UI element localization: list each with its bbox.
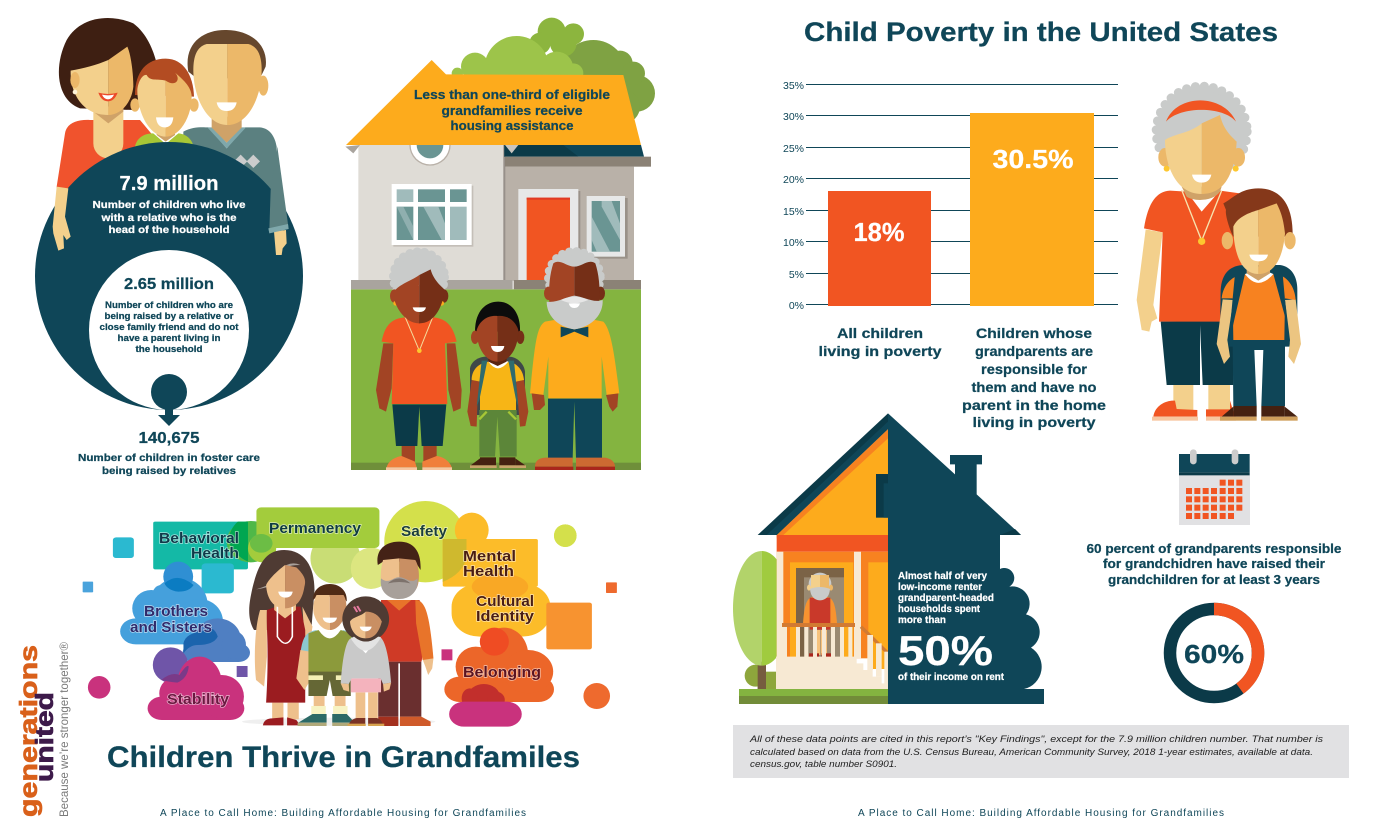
text: rent burden: Almost half of very [898,571,987,582]
text: 140,675 [78,430,260,477]
cloud: stability [153,647,188,683]
family group [242,542,435,726]
heading: Children Thrive in Grandfamiles: Children Thrive in Grandfamiles [107,741,580,774]
donut chart: 60%: 60% [1184,639,1244,669]
gridlines [806,84,1118,304]
text: 60 percent of grandparents: grandchildren for at least 3 years [1108,573,1320,587]
category label: all children [818,325,942,359]
label: Mental Health: Health [463,563,514,580]
text: rent burden [898,571,1005,683]
illustration: house and grandfamily [345,18,655,470]
logo: generations united: generations [15,645,43,817]
text: 2.65 million: being raised by a relative or [104,311,234,321]
big circle [35,142,303,410]
text: 2.65 million: the household [136,344,202,354]
note box: data sources: All of these data points are cited in this report’s "Key Findings", except for the 7.9 million children number. That number is [749,734,1323,745]
bar chart: child poverty [783,80,1118,430]
text: 60 percent of grandparents: 60 percent of grandparents responsible [1086,542,1342,556]
text: rent burden: grandparent-headed [898,593,994,604]
illustration: grandmother and grandson [1137,86,1301,421]
label: Cultural Identity [476,593,535,625]
text: rent burden: households spent [898,604,981,615]
label: Behavioral Health: Behavioral [159,530,239,547]
logo: generations united: Because we’re stronger together® [57,642,71,817]
bar: all children 18% [828,191,931,306]
dark half silhouette [888,413,1044,704]
text: rent burden: of their income on rent [898,672,1005,683]
grandfather [530,251,619,470]
label: Safety: Safety [401,523,448,540]
axis labels: 10% [783,237,804,249]
text: rent burden: low-income renter [898,582,982,593]
axis labels: 15% [783,206,804,218]
panel: housing assistance [345,18,655,470]
category label: children of grandparents: grandparents are [975,343,1093,359]
text: housing assistance callout: grandfamilies receive [442,103,582,118]
text: 7.9 million: head of the household [108,224,230,236]
category label: children of grandparents: responsible for [981,361,1088,377]
boy [300,630,317,657]
axis labels: 35% [783,80,804,92]
note box: data sources: calculated based on data from the U.S. Census Bureau, American Community Survey, 2018 1-year estimates, available at data. [750,747,1313,758]
text: 7.9 million: Number of children who live [92,199,246,211]
text: housing assistance callout: Less than one-third of eligible [414,87,610,102]
axis labels [783,80,804,312]
text: 60 percent of grandparents: for grandchidren have raised their [1103,557,1325,571]
text: 7.9 million: with a relative who is the [100,212,237,224]
boy with backpack [467,302,528,468]
text: 2.65 million [100,276,238,354]
category label: children of grandparents [962,325,1106,430]
label: Brothers and Sisters: Brothers [144,603,208,620]
text: rent burden: 50% [898,627,993,674]
label: Mental Health [463,548,516,580]
text: 2.65 million: 2.65 million [124,276,214,293]
category label: children of grandparents: living in poverty [972,414,1096,430]
label: Cultural Identity: Identity [476,608,535,625]
illustration: half house with rent statistic [733,413,1044,704]
note box: data sources [733,725,1349,778]
label: Mental Health: Mental [463,548,516,565]
label: Behavioral Health [159,530,239,562]
axis labels: 30% [783,111,804,123]
note box: data sources: census.gov, table number S0901. [750,759,897,770]
footer: right: A Place to Call Home: Building Affordable Housing for Grandfamilies [858,808,1224,819]
text: 60 percent of grandparents [1086,542,1342,587]
logo: generations united [15,642,71,817]
text: 2.65 million: have a parent living in [118,333,220,343]
grandmother [376,252,462,470]
grandmother [249,550,314,630]
illustration: colourful bubbles [83,501,617,727]
cloud: belonging [444,628,554,702]
cloud: brothers and sisters [120,577,223,644]
category label: all children: living in poverty [818,343,942,359]
panel: children thrive [83,501,617,819]
text: 2.65 million: Number of children who are [105,300,233,310]
bar: grandparent-headed 30.5% [970,113,1094,306]
footer: left: A Place to Call Home: Building Affordable Housing for Grandfamilies [160,808,526,819]
bar: grandparent-headed 30.5%: 30.5% [992,144,1074,174]
donut chart: 60% [1170,609,1258,697]
label: Belonging: Belonging [463,664,541,681]
roof banner [346,60,641,145]
bar: all children 18%: 18% [854,217,904,247]
axis labels: 25% [783,143,804,155]
label: Behavioral Health: Health [191,545,239,562]
inner white circle [89,250,249,410]
category label: children of grandparents: Children whose [976,325,1092,341]
trees [452,18,655,123]
text: housing assistance callout: housing assistance [450,118,574,133]
text: rent burden: more than [898,615,946,626]
illustration: family of three behind circle [57,18,277,207]
heading: Child Poverty in the United States: Child Poverty in the United States [804,17,1278,47]
logo: generations united: united [31,692,59,782]
axis labels: 20% [783,174,804,186]
small circle with arrow [151,374,187,426]
text: 7.9 million [92,173,246,236]
category label: children of grandparents: parent in the home [962,397,1106,413]
text: housing assistance callout [414,87,610,133]
axis labels: 5% [789,269,804,281]
label: Permanency: Permanency [269,520,362,537]
label: Brothers and Sisters [130,603,212,636]
category label: children of grandparents: them and have no [972,379,1096,395]
label: Brothers and Sisters: and Sisters [130,619,212,636]
text: 2.65 million: close family friend and do not [100,322,238,332]
icon: calendar [1179,449,1250,525]
figure: grandfather on porch [803,573,837,658]
girl [342,596,389,642]
axis labels: 0% [789,300,804,312]
label: Stability: Stability [167,691,230,708]
text: 140,675: being raised by relatives [102,465,236,477]
text: 7.9 million: 7.9 million [120,173,218,195]
text: 140,675: 140,675 [138,430,200,447]
category label: all children: All children [837,325,923,341]
figures' arms over circle [53,147,289,255]
text: 140,675: Number of children in foster care [78,452,260,464]
panel: family statistics [35,18,303,477]
grandfather [378,662,421,717]
label: Cultural Identity: Cultural [476,593,534,610]
